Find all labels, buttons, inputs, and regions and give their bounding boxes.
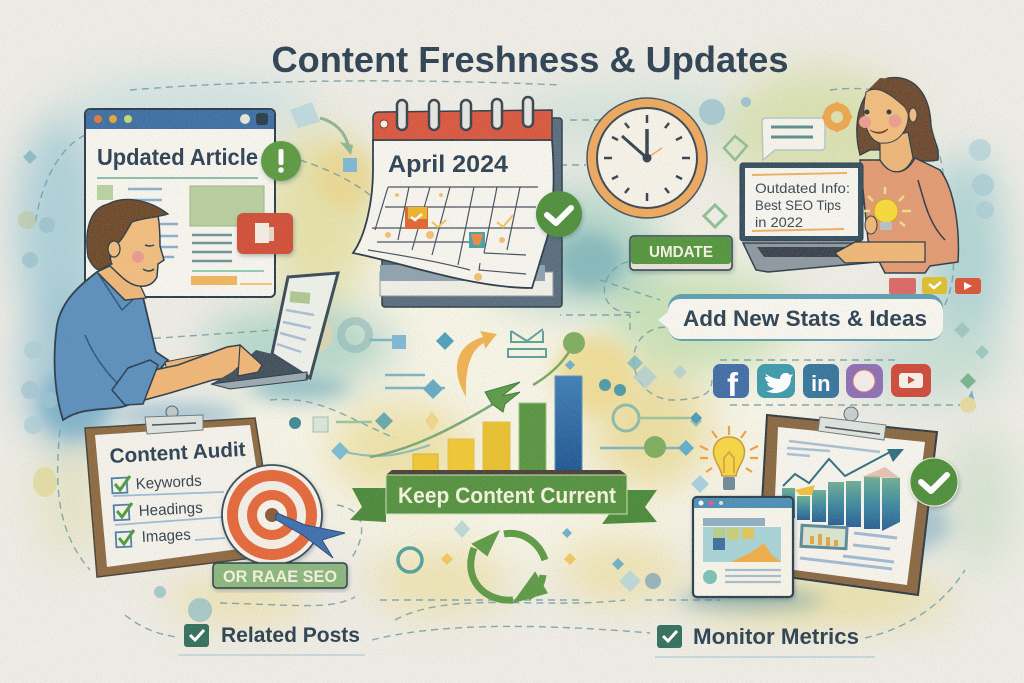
footer item: monitor metrics: [655, 624, 875, 657]
button: update: [630, 236, 732, 270]
laptop screen: [740, 163, 863, 241]
panel: content audit clipboard: [85, 406, 277, 577]
calendar month label: April 2024: [388, 151, 508, 178]
footer item: related posts: [178, 624, 365, 655]
decorative connectors: [35, 81, 965, 640]
clipboard clip: [145, 406, 203, 434]
illustration: woman with laptop: in 2022: [755, 214, 803, 230]
small app icons: [889, 277, 981, 294]
laptop: [272, 273, 338, 378]
neck: [880, 132, 913, 172]
icon: facebook: [713, 364, 749, 403]
icon: lightbulb: [700, 426, 758, 490]
checklist: Images: [141, 526, 191, 546]
small flow nodes: [18, 97, 994, 622]
icon: clock: [587, 98, 707, 218]
banner: add new stats: [658, 294, 943, 341]
footer item: related posts: Related Posts: [221, 624, 360, 647]
pin line: [533, 343, 574, 385]
label: or raae seo: [213, 563, 347, 588]
forearm and hand: [835, 242, 925, 263]
checklist: [112, 473, 225, 547]
icon: gear: [822, 102, 852, 132]
icon: target with dart: [222, 465, 345, 565]
clipboard clip: [818, 407, 886, 440]
bangs: [868, 78, 924, 118]
footer item: monitor metrics: Monitor Metrics: [693, 624, 859, 649]
trend line with arrow: [370, 403, 495, 457]
hair: [87, 199, 168, 270]
laptop text: Outdated Info:: [755, 180, 850, 196]
icon: alert badge: [261, 141, 301, 181]
sweater: [860, 158, 958, 273]
icon: linkedin: [803, 364, 839, 398]
lightbulb in hand: [874, 199, 898, 223]
checklist: Headings: [138, 500, 203, 520]
icon: refresh cycle: [471, 532, 545, 600]
forearm and hand: [137, 345, 262, 402]
heading: updated article: Updated Article: [97, 144, 258, 170]
button: update: UMDATE: [649, 244, 713, 261]
calendar rings: [397, 97, 533, 130]
icon: twitter: [757, 364, 795, 398]
icon: youtube: [891, 364, 931, 397]
neck: [97, 262, 146, 300]
panel: mini browser: [693, 497, 793, 597]
panel: metrics clipboard: [758, 407, 937, 595]
checklist: Keywords: [135, 473, 202, 493]
long hair: [857, 78, 938, 161]
report bars: [782, 476, 900, 531]
bars: [413, 454, 438, 474]
shirt: [55, 272, 168, 420]
label: or raae seo: OR RAAE SEO: [223, 567, 337, 586]
laptop base: [743, 243, 877, 272]
face: [864, 89, 908, 143]
icon: metrics check badge: [910, 458, 958, 506]
sleeve cuff: [112, 360, 158, 405]
panel: calendar: [353, 97, 562, 307]
illustration: woman with laptop: [740, 78, 958, 273]
panel: updated article browser: [85, 109, 275, 297]
panel: growth chart: [370, 329, 585, 474]
trend line: [783, 452, 890, 486]
arm behind: [165, 352, 225, 371]
icon: instagram: [846, 364, 883, 398]
watercolor wash background: [15, 68, 1012, 622]
icon: linkedin: in: [811, 371, 831, 396]
banner text: Keep Content Current: [398, 483, 617, 508]
illustration: man at laptop: [55, 199, 338, 420]
illustration: woman with laptop: Best SEO Tips: [755, 197, 841, 213]
calendar grid: [368, 187, 538, 274]
banner: keep content current: [350, 470, 657, 524]
banner text: Add New Stats & Ideas: [683, 306, 927, 331]
social media icons: [713, 364, 931, 403]
icon: red button: [237, 213, 293, 254]
clipboard heading: Content Audit: [109, 438, 246, 468]
title: Content Freshness & Updates: [272, 39, 788, 80]
envelope icon: [508, 329, 546, 357]
orange arrow: [457, 331, 497, 397]
icon: calendar check badge: [536, 191, 582, 237]
icon: facebook: f: [727, 366, 739, 403]
icon: speech bubble: [762, 118, 825, 160]
face: [110, 214, 164, 286]
